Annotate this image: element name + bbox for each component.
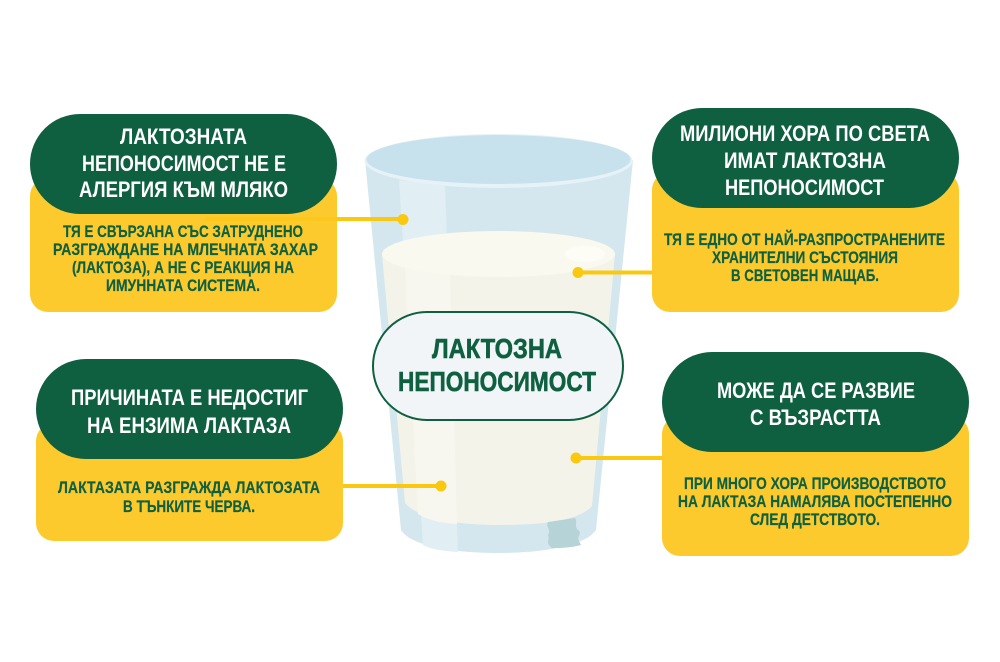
- heading: develops with age: [717, 378, 915, 430]
- heading: millions of people: ИМАТ ЛАКТОЗНА: [724, 148, 886, 173]
- panel: cause: [36, 359, 343, 541]
- text: not a milk allergy: ИМУННАТА СИСТЕМА.: [106, 277, 260, 295]
- text: millions of people: ТЯ Е ЕДНО ОТ НАЙ-РАЗПРОСТРАНЕНИТЕ: [664, 230, 945, 249]
- heading: not a milk allergy: ЛАКТОЗНАТА: [120, 124, 247, 149]
- title badge: [373, 312, 623, 420]
- text: millions of people: В СВЕТОВЕН МАЩАБ.: [731, 267, 879, 285]
- heading: millions of people: [680, 121, 930, 200]
- title badge: ЛАКТОЗНА: [432, 333, 562, 364]
- heading: not a milk allergy: НЕПОНОСИМОСТ НЕ Е: [82, 151, 286, 176]
- heading: develops with age: МОЖЕ ДА СЕ РАЗВИЕ: [717, 378, 915, 403]
- connector: top left: [200, 214, 408, 225]
- text: develops with age: ПРИ МНОГО ХОРА ПРОИЗВОДСТВОТО: [684, 475, 946, 493]
- text: cause: [58, 479, 320, 516]
- connector: bottom right: [570, 452, 664, 464]
- title badge: НЕПОНОСИМОСТ: [398, 366, 596, 397]
- text: not a milk allergy: (ЛАКТОЗА), А НЕ С РЕАКЦИЯ НА: [72, 259, 294, 277]
- text: not a milk allergy: [53, 223, 318, 295]
- text: millions of people: ХРАНИТЕЛНИ СЪСТОЯНИЯ: [712, 249, 898, 267]
- panel: millions of people: [652, 108, 959, 312]
- text: cause: В ТЪНКИТЕ ЧЕРВА.: [123, 498, 255, 516]
- heading: cause: ПРИЧИНАТА Е НЕДОСТИГ: [71, 385, 308, 410]
- icon: glass of milk: [364, 134, 633, 553]
- text: not a milk allergy: ТЯ Е СВЪРЗАНА СЪС ЗАТРУДНЕНО: [63, 223, 303, 241]
- text: cause: ЛАКТАЗАТА РАЗГРАЖДА ЛАКТОЗАТА: [58, 479, 320, 497]
- heading: millions of people: НЕПОНОСИМОСТ: [725, 175, 884, 200]
- panel: not a milk allergy: [30, 114, 337, 312]
- text: not a milk allergy: РАЗГРАЖДАНЕ НА МЛЕЧНАТА ЗАХАР: [53, 241, 318, 259]
- text: develops with age: СЛЕД ДЕТСТВОТО.: [750, 511, 880, 529]
- heading: not a milk allergy: АЛЕРГИЯ КЪМ МЛЯКО: [79, 177, 288, 202]
- text: develops with age: НА ЛАКТАЗА НАМАЛЯВА ПОСТЕПЕННО: [678, 493, 952, 511]
- heading: develops with age: С ВЪЗРАСТТА: [750, 405, 881, 430]
- text: develops with age: [678, 475, 952, 529]
- heading: millions of people: МИЛИОНИ ХОРА ПО СВЕТА: [680, 121, 930, 146]
- connector: top right: [572, 267, 654, 278]
- connector: bottom left: [341, 480, 446, 492]
- heading: cause: [71, 385, 308, 438]
- heading: not a milk allergy: [79, 124, 288, 202]
- text: millions of people: [664, 230, 945, 285]
- panel: develops with age: [662, 352, 969, 556]
- heading: cause: НА ЕНЗИМА ЛАКТАЗА: [87, 413, 291, 438]
